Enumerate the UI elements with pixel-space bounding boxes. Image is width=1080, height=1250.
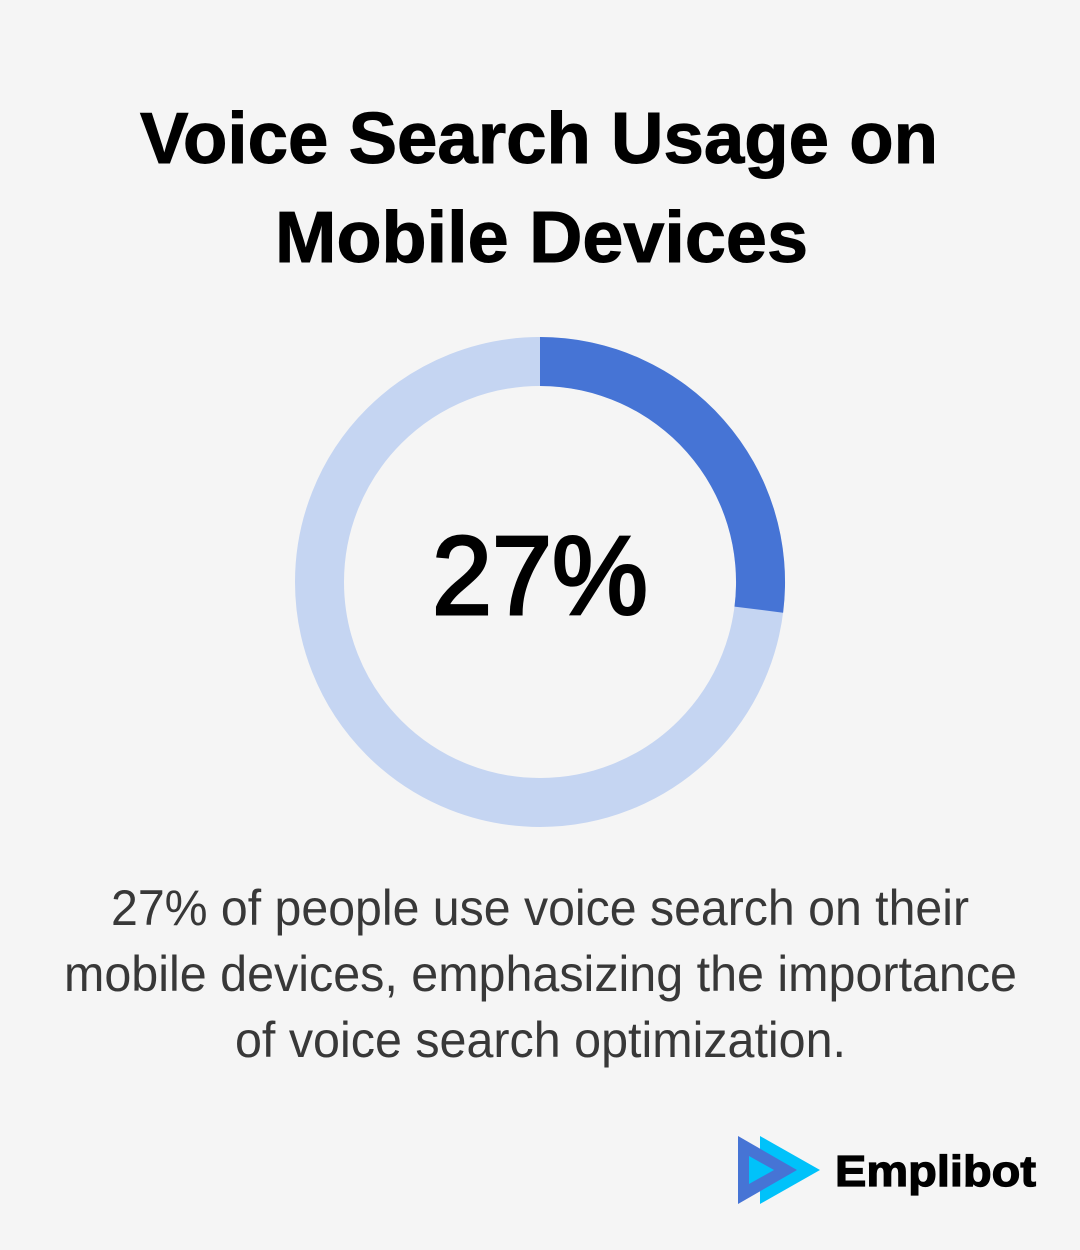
title — [140, 99, 938, 278]
donut chart: 27 percent — [320, 337, 785, 802]
description text: mobile devices, emphasizing the importance — [64, 946, 1017, 1002]
logo: Emplibot — [738, 1136, 1036, 1204]
title: Voice Search Usage on — [140, 99, 938, 179]
description text — [64, 880, 1017, 1068]
donut center value: 27% — [432, 514, 648, 638]
donut track — [320, 362, 760, 802]
description text: of voice search optimization. — [235, 1012, 846, 1068]
description text: 27% of people use voice search on their — [111, 880, 969, 936]
logo wordmark: Emplibot — [835, 1147, 1036, 1196]
donut value segment — [540, 337, 785, 613]
title: Mobile Devices — [275, 198, 808, 278]
icon: play triangles — [738, 1136, 820, 1204]
